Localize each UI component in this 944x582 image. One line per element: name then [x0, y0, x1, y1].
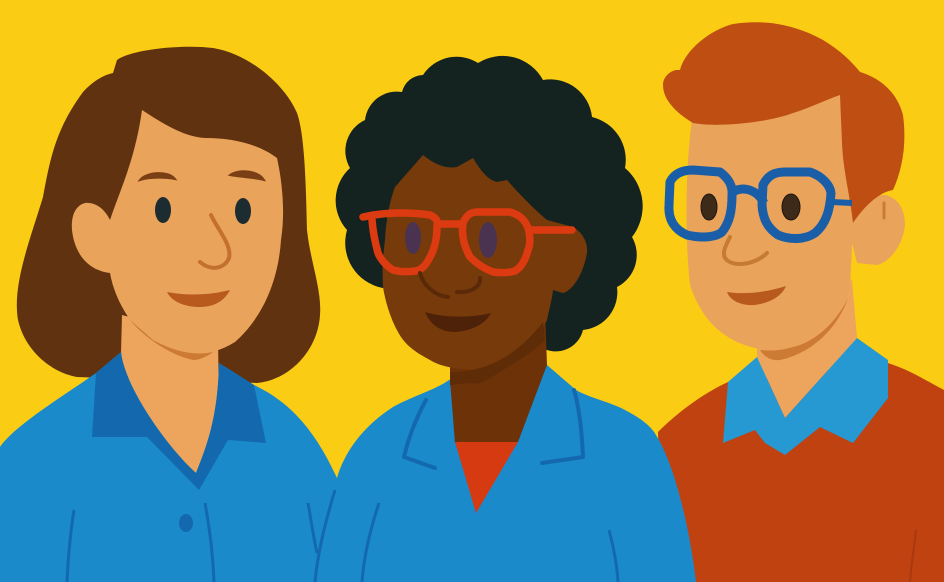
neck [450, 310, 547, 443]
eyes [155, 197, 251, 224]
mouth [425, 312, 491, 332]
glasses: red [363, 212, 572, 273]
glasses: blue [669, 170, 852, 239]
face [110, 110, 283, 355]
sweater fold [910, 530, 916, 582]
neck [757, 280, 857, 418]
chin shadow [450, 322, 545, 385]
ear [852, 195, 905, 265]
mouth [167, 290, 230, 307]
eyebrows [140, 171, 264, 180]
ear [72, 203, 110, 273]
mouth [727, 286, 786, 305]
shirt: blue [318, 365, 696, 582]
person: man with red hair [658, 22, 944, 582]
nose [200, 215, 229, 268]
collar outline [404, 390, 583, 468]
shirt folds [67, 503, 317, 582]
undershirt: red [455, 442, 518, 513]
chin shadow [130, 320, 213, 360]
shirt button [179, 514, 193, 532]
nose [420, 273, 480, 297]
collar: light blue [723, 338, 888, 455]
face [686, 90, 853, 350]
ear and face [383, 155, 587, 370]
shirt: blue [0, 352, 338, 582]
neck [121, 315, 219, 473]
hair: orange-red [663, 22, 904, 223]
ear inner line [882, 203, 886, 218]
eyes [405, 222, 497, 258]
nose [724, 237, 767, 264]
collar: dark blue [92, 352, 266, 490]
person: woman with curly black hair [315, 56, 696, 582]
person: woman with brown hair [0, 47, 338, 582]
eyes [701, 194, 800, 220]
shirt folds [315, 490, 618, 582]
hair: brown [17, 47, 320, 383]
sweater: red [658, 363, 944, 582]
chin shadow [760, 298, 848, 360]
hair: curly black [336, 56, 643, 351]
